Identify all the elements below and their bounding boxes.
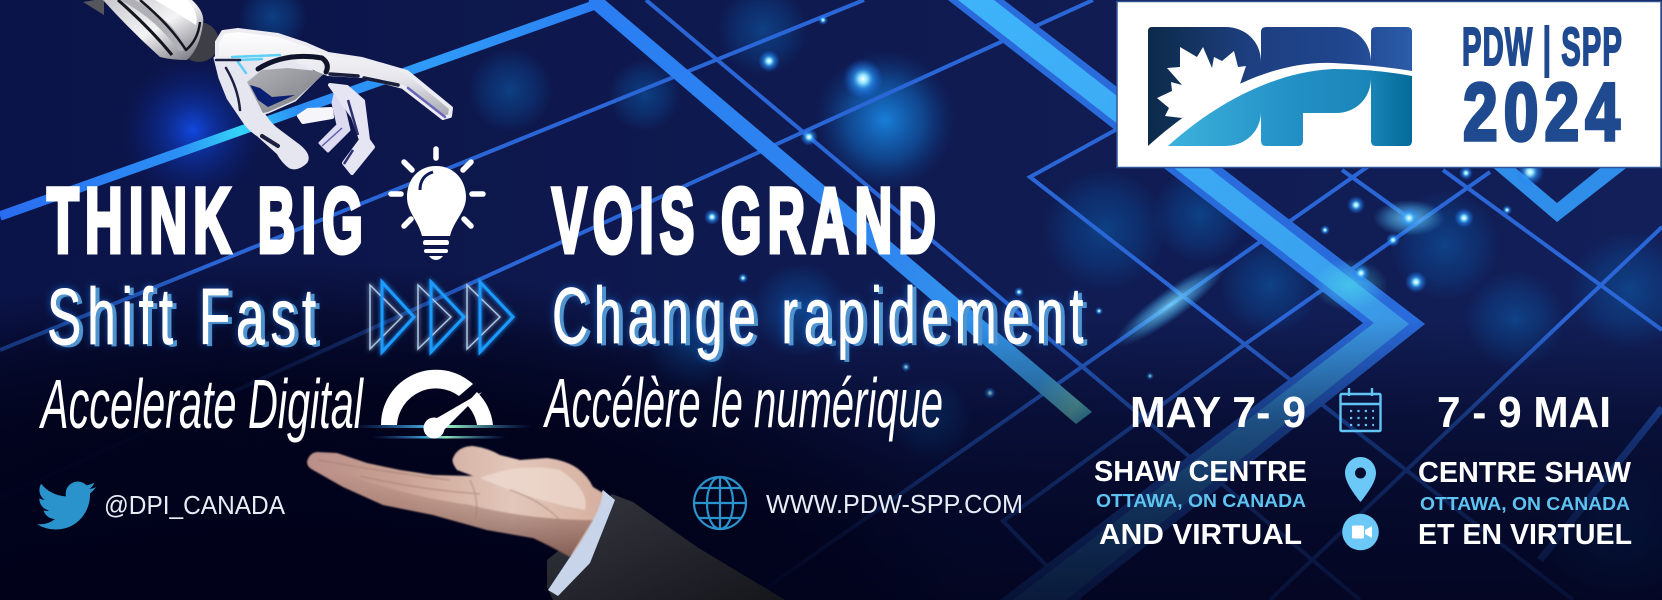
event details: English: OTTAWA, ON CANADA bbox=[1096, 491, 1306, 511]
icon: light bulb bbox=[391, 149, 483, 260]
subheading: Change rapidement: Change rapidement bbox=[552, 271, 1089, 360]
icon: twitter bird bbox=[37, 482, 96, 530]
event details: French: 7 - 9 MAI bbox=[1437, 388, 1611, 437]
DPI logo mark bbox=[1148, 27, 1412, 146]
robot thumb and palm bbox=[215, 55, 318, 168]
robot back of hand and index finger bbox=[217, 30, 451, 118]
headline: VOIS GRAND: VOIS GRAND bbox=[552, 170, 942, 272]
event details: French bbox=[1418, 388, 1632, 551]
headline: THINK BIG: THINK BIG bbox=[47, 170, 369, 272]
stars bbox=[704, 15, 1544, 399]
human hand holding the gauge bbox=[307, 446, 785, 600]
icon: video camera bbox=[1342, 514, 1379, 550]
robot hand bbox=[83, 0, 451, 173]
gauge glow streaks bbox=[352, 425, 532, 428]
small chevron top right bbox=[1490, 165, 1630, 222]
palm and fingers bbox=[307, 446, 603, 557]
icon: location pin bbox=[1345, 457, 1376, 502]
icon: calendar bbox=[1340, 388, 1380, 431]
event details: English: MAY 7- 9 bbox=[1130, 388, 1306, 437]
robot lower fingers bbox=[299, 85, 373, 173]
shirt cuff bbox=[548, 490, 615, 596]
website: WWW.PDW-SPP.COM bbox=[766, 491, 1023, 519]
icon: triple neon arrows bbox=[370, 282, 513, 352]
tagline: Accélère le numérique: Accélère le numérique bbox=[543, 364, 943, 442]
logo panel bbox=[1117, 2, 1661, 168]
suit sleeve bbox=[547, 494, 785, 600]
icon: globe bbox=[694, 477, 746, 529]
maple leaf bbox=[1157, 47, 1246, 118]
event details: English: SHAW CENTRE bbox=[1094, 456, 1307, 488]
event details: English: AND VIRTUAL bbox=[1099, 519, 1302, 551]
event details: French: CENTRE SHAW bbox=[1418, 457, 1632, 489]
event details: French: ET EN VIRTUEL bbox=[1418, 519, 1632, 551]
robot forearm bbox=[83, 0, 219, 62]
tagline: Accelerate Digital: Accelerate Digital bbox=[39, 365, 364, 443]
subheading: Shift Fast: Shift Fast bbox=[47, 272, 322, 361]
thick line rising to the right bbox=[0, 3, 600, 216]
twitter handle: @DPI_CANADA bbox=[104, 492, 285, 520]
event details: English bbox=[1094, 388, 1307, 551]
lower right band bbox=[1540, 408, 1662, 560]
thick line falling to the right bbox=[588, 0, 1092, 424]
icon: speed gauge bbox=[352, 370, 532, 438]
large chevron bbox=[948, 0, 1425, 600]
event details: French: OTTAWA, ON CANADA bbox=[1420, 494, 1630, 514]
lens flares bbox=[1106, 200, 1445, 357]
robot palm recess bbox=[247, 68, 326, 113]
robot hand details bbox=[216, 55, 445, 146]
